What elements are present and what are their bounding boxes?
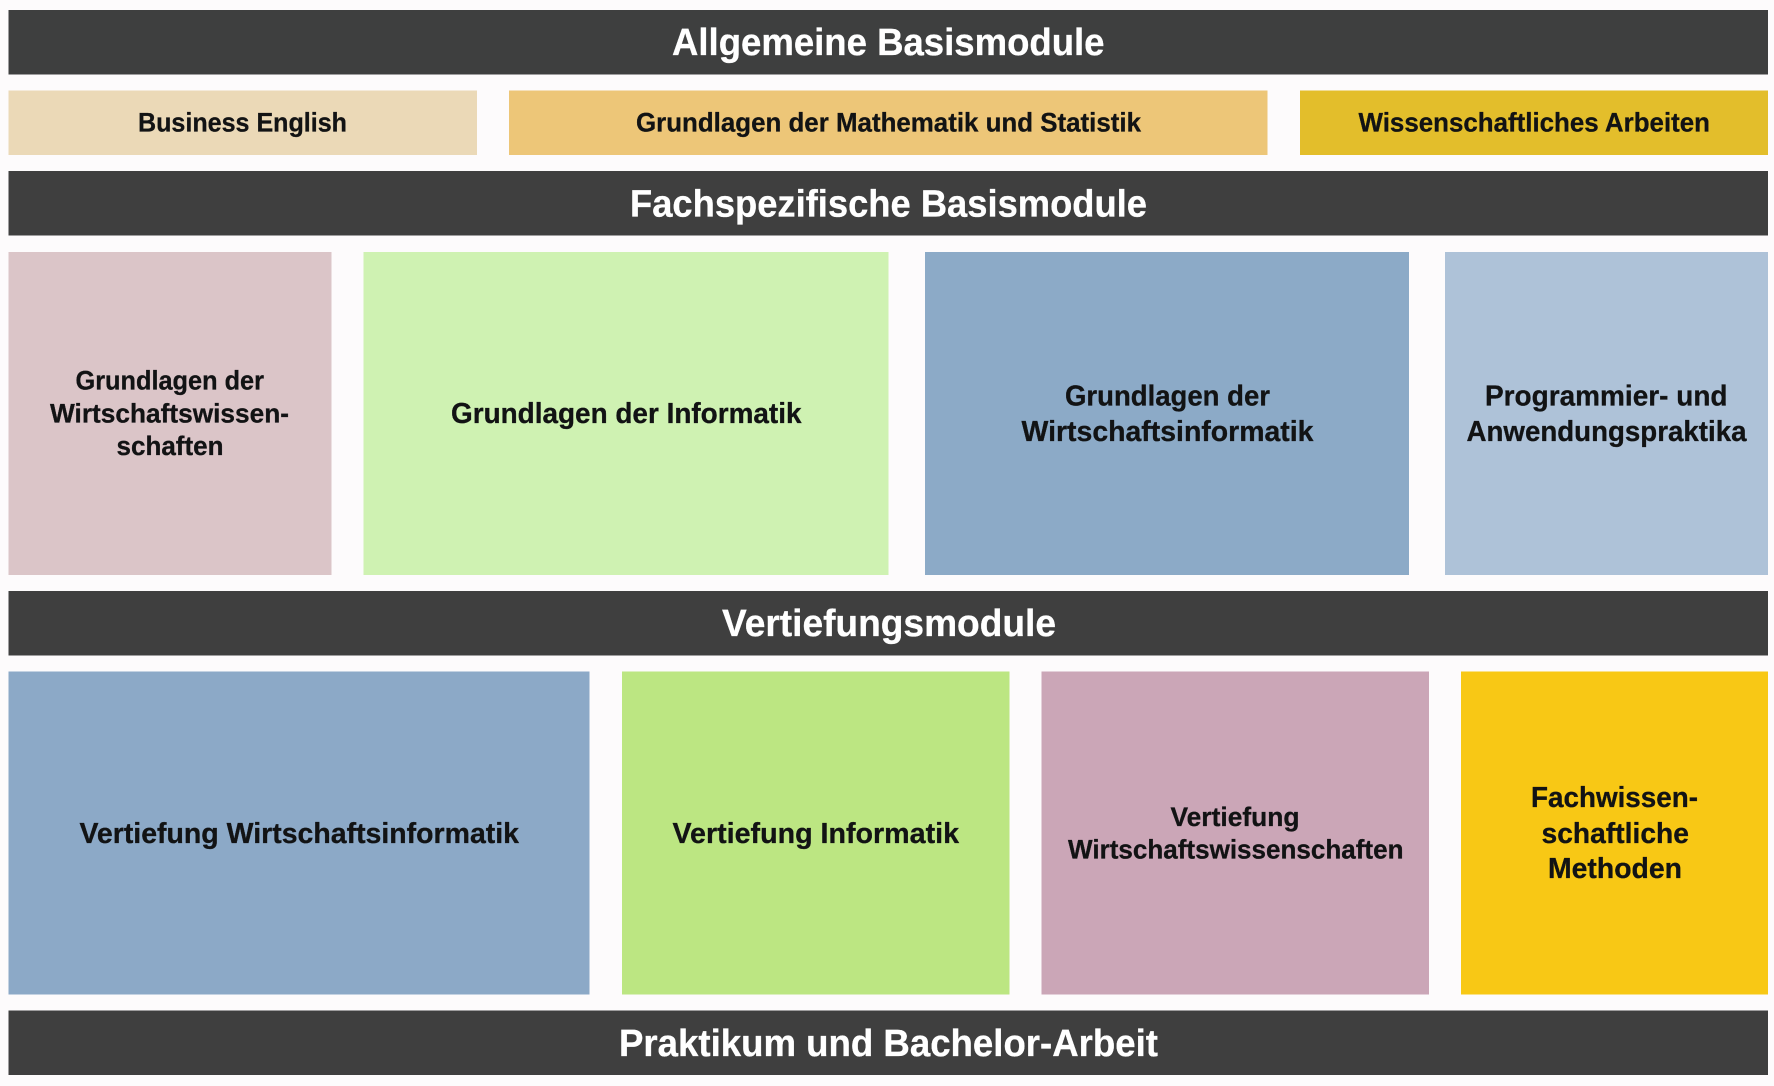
panel: Vertiefung Wirtschaftswissenschaften <box>1042 672 1429 994</box>
panel: Programmier- und Anwendungspraktika: Programmier- und <box>1485 380 1728 412</box>
heading bar: Vertiefungsmodule <box>8 591 1768 656</box>
panel: Grundlagen der Wirtschaftswissenschaften <box>8 252 332 575</box>
heading bar: Vertiefungsmodule: Vertiefungsmodule <box>722 603 1056 645</box>
panel: Fachwissenschaftliche Methoden <box>1461 672 1768 994</box>
panel: Grundlagen der Wirtschaftsinformatik: Wirtschaftsinformatik <box>1022 416 1314 448</box>
panel: Grundlagen der Wirtschaftswissenschaften: Grundlagen der <box>76 366 264 396</box>
panel: Wissenschaftliches Arbeiten <box>1300 90 1768 155</box>
panel: Business English: Business English <box>138 108 347 138</box>
panel: Vertiefung Wirtschaftswissenschaften: Wirtschaftswissenschaften <box>1068 834 1404 864</box>
heading bar: Praktikum und Bachelor-Arbeit <box>8 1010 1768 1075</box>
panel: Grundlagen der Wirtschaftswissenschaften: Wirtschaftswissen- <box>50 399 289 429</box>
panel: Vertiefung Wirtschaftsinformatik <box>8 672 590 994</box>
panel: Fachwissenschaftliche Methoden: schaftliche <box>1542 818 1689 850</box>
panel: Grundlagen der Informatik <box>364 252 888 575</box>
panel: Wissenschaftliches Arbeiten: Wissenschaftliches Arbeiten <box>1358 108 1710 138</box>
heading bar: Fachspezifische Basismodule: Fachspezifische Basismodule <box>630 184 1147 226</box>
panel: Vertiefung Informatik <box>622 672 1010 994</box>
panel: Grundlagen der Mathematik und Statistik: Grundlagen der Mathematik und Statistik <box>636 108 1142 138</box>
panel: Fachwissenschaftliche Methoden: Fachwissen- <box>1531 782 1698 814</box>
panel: Grundlagen der Wirtschaftsinformatik: Grundlagen der <box>1065 380 1270 412</box>
panel: Grundlagen der Mathematik und Statistik <box>509 90 1268 155</box>
panel: Grundlagen der Wirtschaftsinformatik <box>925 252 1409 575</box>
panel: Vertiefung Informatik: Vertiefung Informatik <box>672 818 960 850</box>
panel: Programmier- und Anwendungspraktika <box>1445 252 1768 575</box>
heading bar: Allgemeine Basismodule: Allgemeine Basismodule <box>672 22 1104 64</box>
panel: Business English <box>8 90 477 155</box>
heading bar: Allgemeine Basismodule <box>8 10 1768 74</box>
panel: Fachwissenschaftliche Methoden: Methoden <box>1548 853 1682 885</box>
panel: Grundlagen der Wirtschaftswissenschaften: schaften <box>116 431 224 461</box>
panel: Grundlagen der Informatik: Grundlagen der Informatik <box>451 398 802 430</box>
panel: Vertiefung Wirtschaftswissenschaften: Vertiefung <box>1170 802 1300 832</box>
heading bar: Praktikum und Bachelor-Arbeit: Praktikum und Bachelor-Arbeit <box>619 1023 1158 1065</box>
heading bar: Fachspezifische Basismodule <box>8 171 1768 236</box>
panel: Vertiefung Wirtschaftsinformatik: Vertiefung Wirtschaftsinformatik <box>80 818 520 850</box>
panel: Programmier- und Anwendungspraktika: Anwendungspraktika <box>1466 416 1747 448</box>
